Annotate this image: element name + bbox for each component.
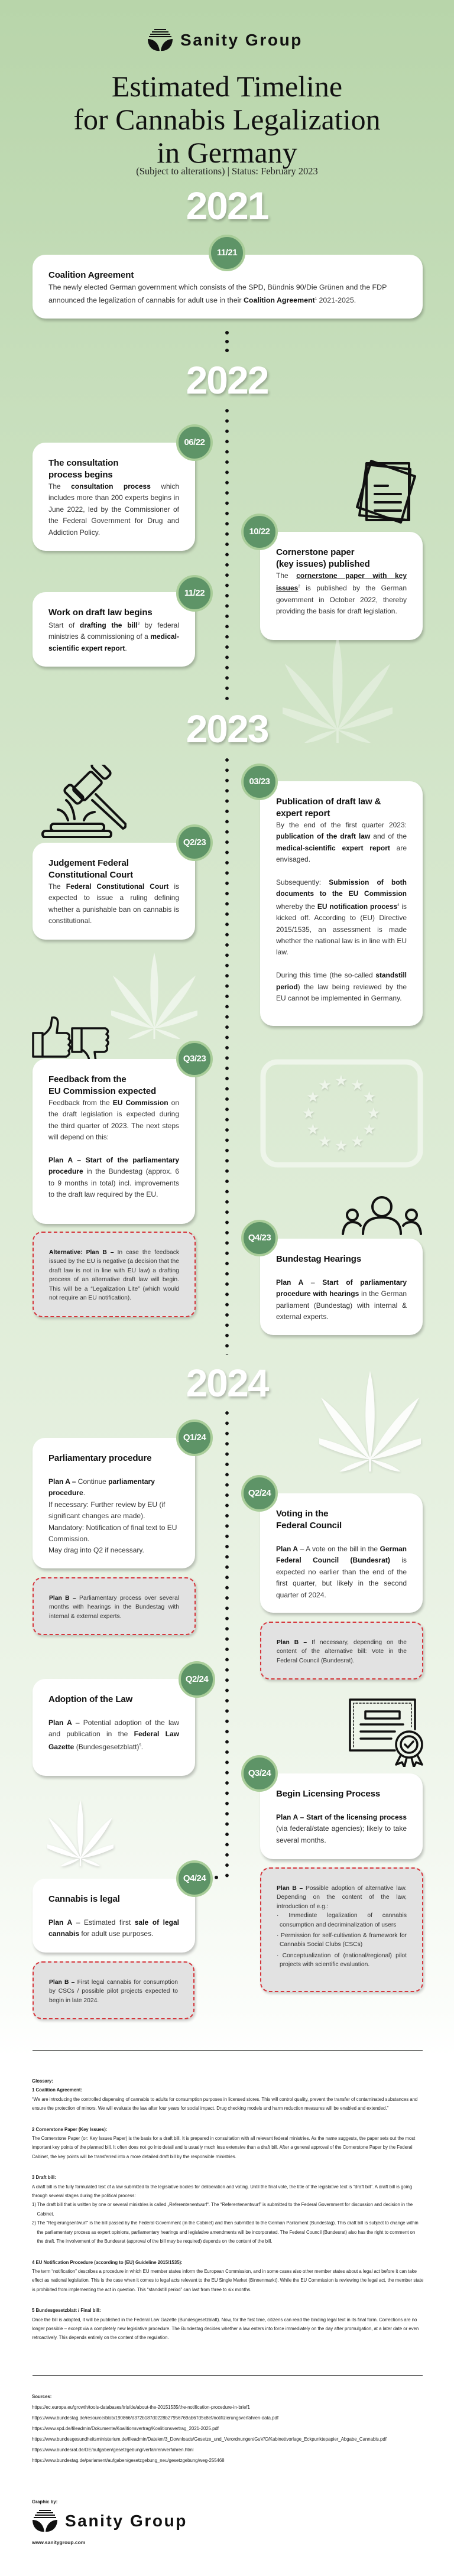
icon: certificate <box>349 1698 423 1767</box>
icon: cannabis leaf <box>111 953 197 1039</box>
glossary: 5 Bundesgesetzblatt / Final bill: <box>32 2308 101 2313</box>
card: feedback from EU commission <box>33 1059 195 1224</box>
card: publication of draft law: During this time (the so-called standstill period) the law being reviewed by the EU cannot be implemented in Germany. <box>276 971 407 1002</box>
glossary: retroactively. This depends entirely on the content of the regulation. <box>32 2335 169 2340</box>
title: Estimated Timeline <box>112 70 342 103</box>
sources: Sources: <box>32 2394 51 2399</box>
glossary: the parliamentary process as expert opinions, parliamentary hearings and legislative amendments will be incorporated. The Federal Council (Bundesrat) also has the right to comment on <box>37 2230 415 2235</box>
title: for Cannabis Legalization <box>73 103 381 136</box>
icon: thumbs up and down <box>32 1016 109 1059</box>
glossary: the draft. The involvement of the Bundesrat (approval of the bill may be required) depends on the content of the bill. <box>37 2239 272 2244</box>
plan B: federal council vote: Plan B – If necessary, depending on the content of the alternative bill: Vote in the Federal Council (Bundesrat). <box>277 1639 407 1664</box>
badge Q4/24: Q4/24 <box>183 1873 206 1883</box>
card: Coalition Agreement: Coalition Agreement <box>48 270 134 280</box>
badge Q1/24 <box>176 1419 213 1456</box>
glossary: through several stages during the political process: <box>32 2193 136 2198</box>
glossary: effect as national legislation. This is the case when it comes to legal acts relevant to the EU Single Market (Binnenmarkt). While the EU Commission is reviewing the legal act, the member state <box>32 2278 423 2283</box>
icon: EU flag <box>260 1059 423 1168</box>
card: voting in federal council <box>260 1493 423 1613</box>
glossary: 1) The draft bill that is written by one or several ministries is called „Referentenentwurf“. The “Referentenentwurf” is submitted to the Federal Government for discussion and decision in the <box>32 2202 413 2207</box>
badge 10/22 <box>241 514 278 550</box>
card: begin licensing process: Begin Licensing Process <box>276 1789 380 1799</box>
glossary: The Cornerstone Paper (or: Key Issues Paper) is the basis for a draft bill. It is prepared in consultation with all relevant federal ministries. As the name suggests, the paper sets out the most <box>32 2136 415 2141</box>
card: judgement federal constitutional court: Judgement Federal <box>48 858 129 868</box>
website: www.sanitygroup.com <box>32 2539 85 2545</box>
card: parliamentary procedure <box>33 1438 195 1568</box>
card: judgement federal constitutional court: The Federal Constitutional Court is expected to issue a ruling defining whether a punishable ban on cannabis is constitutional. <box>48 882 179 925</box>
glossary: 3 Draft bill: <box>32 2175 56 2180</box>
card: work on draft law <box>33 592 195 667</box>
plan B: alternative law: · Immediate legalization of cannabis consumption and decriminalization of users <box>277 1912 407 1928</box>
icon: cannabis leaf <box>319 1371 422 1473</box>
plan B: alternative law: · Permission for self-cultivation & framework for Cannabis Social Clubs (CSCs) <box>277 1932 407 1948</box>
card: begin licensing process: Plan A – Start of the licensing process (via federal/state agencies); likely to take several months. <box>276 1813 407 1844</box>
badge Q2/24 right: Q2/24 <box>248 1488 271 1498</box>
card: cannabis is legal <box>33 1879 195 1953</box>
card: voting in federal council: Voting in the <box>276 1509 328 1519</box>
card: Coalition Agreement: The newly elected German government which consists of the SPD, Bündnis 90/Die Grünen and the FDP announced the legalization of cannabis for adult use in their Coalition Agreement1 2021-2025. <box>48 283 387 304</box>
card: parliamentary procedure: Plan A – Continue parliamentary procedure. <box>48 1477 155 1497</box>
glossary: 4 EU Notification Procedure (according to (EU) Guideline 2015/1535): <box>32 2260 183 2265</box>
glossary: ensure the protection of minors. We will evaluate the law after four years for social impact. Drug checking models and harm reduction measures will be enabled and extended.” <box>32 2106 388 2111</box>
card: Bundestag hearings <box>260 1239 423 1335</box>
card: adoption of the law: Plan A – Potential adoption of the law and publication in the Federal Law Gazette (Bundesgesetzblatt)5. <box>48 1719 179 1751</box>
card: work on draft law: Work on draft law begins <box>48 608 153 618</box>
glossary <box>32 2078 423 2340</box>
badge 11/21 <box>209 235 245 271</box>
badge Q3/24 <box>241 1755 278 1792</box>
card: feedback from EU commission: Feedback from the EU Commission on the draft legislation is expected during the third quarter of 2023. The next steps will depend on this: <box>48 1099 179 1141</box>
plan B: alternative law: · Conceptualization of (national/regional) pilot projects with scientific evaluation. <box>277 1953 407 1968</box>
card: cornerstone paper: The cornerstone paper with key issues2 is published by the German government in October 2022, thereby providing the basis for draft legislation. <box>276 571 407 615</box>
year heading 2024: 2024 <box>186 1361 268 1405</box>
glossary: 2 Cornerstone Paper (Key Issues): <box>32 2127 107 2132</box>
year heading 2023: 2023 <box>186 707 268 751</box>
glossary: longer possible – except via a completely new legislative procedure. The Bundestag decides whether a law enters into force immediately on the day after promulgation, at a later date or even <box>32 2326 419 2331</box>
card: Coalition Agreement <box>33 255 423 319</box>
card: work on draft law: Start of drafting the bill3 by federal ministries & commissioning of a medical-scientific expert report. <box>48 621 179 652</box>
sources: https://www.bundestag.de/resource/blob/190866/d372b187d0228b27956769ab67d5c8ef/notifizierungsverfahren-data.pdf <box>32 2415 278 2421</box>
badge Q2/24 right <box>241 1475 278 1512</box>
glossary: Once the bill is adopted, it will be published in the Federal Law Gazette (Bundesgesetzblatt). Now, for the first time, citizens can read the binding legal text in its final form. Corrections are no <box>32 2317 417 2322</box>
card: publication of draft law: Subsequently: Submission of both documents to the EU Commission whereby the EU notification process4 is kicked off. According to (EU) Directive 2015/1535, an assessment is made whether the national law is in line with EU law. <box>276 878 407 956</box>
card: publication of draft law: expert report <box>276 808 330 818</box>
icon: cannabis leaf white <box>47 1801 115 1868</box>
badge Q2/24 left: Q2/24 <box>186 1674 208 1684</box>
card: voting in federal council: Plan A – A vote on the bill in the German Federal Council (Bundesrat) is expected no earlier than the end of the first quarter, but likely in the second quarter of 2024. <box>276 1545 407 1599</box>
icon: documents <box>356 460 416 524</box>
badge Q2/23: Q2/23 <box>183 837 206 847</box>
icon: gavel <box>41 765 127 838</box>
card: parliamentary procedure: If necessary: Further review by EU (if significant changes are made). <box>48 1500 165 1520</box>
sources: https://ec.europa.eu/growth/tools-databases/tris/de/about-the-20151535/the-notification-procedure-in-brief1 <box>32 2405 250 2410</box>
logo: Sanity Group header <box>148 29 303 51</box>
glossary: is prohibited from implementing the act in question. This “standstill period” can last from three to six months. <box>32 2287 251 2292</box>
sources: https://www.bundesrat.de/DE/aufgaben/gesetzgebung/verfahren/verfahren.html <box>32 2447 194 2452</box>
logo: Sanity Group header: Sanity Group <box>180 31 303 49</box>
badge Q2/23 <box>176 824 213 861</box>
card: consultation process: The consultation process which includes more than 200 experts begins in June 2022, led by the Commissioner of the Federal Government for Drug and Addiction Policy. <box>48 482 179 537</box>
badge Q3/23: Q3/23 <box>183 1054 206 1064</box>
badge 10/22: 10/22 <box>249 527 270 537</box>
card: publication of draft law: By the end of the first quarter 2023: publication of the draft law and of the medical-scientific expert report are envisaged. <box>276 821 407 863</box>
subtitle: (Subject to alterations) | Status: February 2023 <box>136 165 318 177</box>
badge 03/23: 03/23 <box>249 777 270 787</box>
card: publication of draft law <box>260 781 423 1026</box>
badge Q4/23 <box>241 1220 278 1256</box>
badge Q4/23: Q4/23 <box>248 1233 271 1243</box>
card: cornerstone paper <box>260 532 423 640</box>
card: Bundestag hearings: Bundestag Hearings <box>276 1254 361 1264</box>
plan B: alternative law <box>260 1867 423 1992</box>
badge 11/22: 11/22 <box>184 588 205 598</box>
card: voting in federal council: Federal Council <box>276 1521 342 1531</box>
card: feedback from EU commission: EU Commission expected <box>48 1086 156 1096</box>
plan B: federal council vote <box>260 1622 423 1680</box>
card: judgement federal constitutional court <box>33 843 195 940</box>
badge Q3/24: Q3/24 <box>248 1768 271 1778</box>
badge 06/22: 06/22 <box>184 437 205 447</box>
card: parliamentary procedure: Mandatory: Notification of final text to EU Commission. <box>48 1523 177 1543</box>
card: cornerstone paper: (key issues) published <box>276 559 370 569</box>
glossary: Glossary: <box>32 2078 53 2084</box>
card: Bundestag hearings: Plan A – Start of parliamentary procedure with hearings in the German parliament (Bundestag) with internal & external experts. <box>276 1278 407 1321</box>
card: consultation process: process begins <box>48 470 113 480</box>
glossary: important key points of the planned bill. It often does not go into detail and is usually much less extensive than a draft bill. After a general approval of the Cornerstone Paper by the Federal <box>32 2145 413 2150</box>
sources: https://www.bundesgesundheitsministerium.de/fileadmin/Dateien/3_Downloads/Gesetze_und_Verordnungen/GuV/C/Kabinettvorlage_Eckpunktepapier_Abgabe_Cannabis.pdf <box>32 2437 387 2442</box>
badge Q1/24: Q1/24 <box>183 1432 206 1443</box>
glossary: The term “notification” describes a procedure in which EU member states inform the European Commission, and in some cases also other member states about a legal act before it can take <box>32 2269 417 2274</box>
glossary: 2) The “Regierungsentwurf” is the bill passed by the Federal Government (in the Cabinet) and then submitted to the German Parliament (Bundestag). This draft bill is subject to change within <box>32 2220 419 2226</box>
badge 11/21: 11/21 <box>217 248 237 258</box>
logo: Sanity Group footer: Sanity Group <box>65 2512 187 2530</box>
graphic by: Graphic by: <box>32 2499 57 2504</box>
card: consultation process: The consultation <box>48 458 118 468</box>
card: publication of draft law: Publication of draft law & <box>276 797 381 807</box>
card: parliamentary procedure: May drag into Q2 if necessary. <box>48 1546 144 1554</box>
card: feedback from EU commission: Feedback from the <box>48 1074 127 1084</box>
logo: Sanity Group footer <box>33 2510 187 2532</box>
sources: https://www.spd.de/fileadmin/Dokumente/Koalitionsvertrag/Koalitionsvertrag_2021-2025.pdf <box>32 2426 219 2431</box>
card: parliamentary procedure: Parliamentary procedure <box>48 1453 151 1463</box>
card: cannabis is legal: Plan A – Estimated first sale of legal cannabis for adult use purposes. <box>48 1918 179 1938</box>
icon: people <box>342 1196 422 1235</box>
card: feedback from EU commission: Plan A – Start of the parliamentary procedure in the Bundestag (approx. 6 to 9 months in total) incl. improvements to the draft law required by the EU. <box>48 1156 179 1198</box>
year heading 2022: 2022 <box>186 358 268 402</box>
plan B: CSCs <box>33 1961 194 2019</box>
badge 11/22 <box>176 575 213 612</box>
title: in Germany <box>157 136 297 169</box>
glossary: Cabinet. <box>37 2211 54 2217</box>
badge Q3/23 <box>176 1041 213 1077</box>
plan B: parliamentary process: Plan B – Parliamentary process over several months with hearings in the Bundestag with internal & external experts. <box>49 1595 179 1620</box>
badge Q2/24 left <box>179 1661 215 1698</box>
plan B: parliamentary process <box>33 1577 196 1635</box>
card: adoption of the law <box>33 1679 195 1776</box>
glossary: A draft bill is the fully formulated text of a law submitted to the legislative bodies for deliberation and voting. Until the final vote, the title of the legislative text is “draft bill”. A draft bill is going <box>32 2184 412 2190</box>
sources <box>32 2394 387 2463</box>
badge 03/23 <box>241 764 278 800</box>
icon: cannabis leaf watermark <box>283 640 393 743</box>
plan B: legalization lite: Alternative: Plan B – In case the feedback issued by the EU is negative (a decision that the draft law is not in line with EU law) a drafting process of an alternative draft law will begin. This will be a “Legalization Lite” (which would not require an EU notification). <box>49 1249 179 1301</box>
card: judgement federal constitutional court: Constitutional Court <box>48 870 133 880</box>
sources: https://www.bundestag.de/parlament/aufgaben/gesetzgebung_neu/gesetzgebung/weg-255468 <box>32 2458 225 2463</box>
card: cannabis is legal: Cannabis is legal <box>48 1894 120 1904</box>
glossary: 1 Coalition Agreement: <box>32 2087 82 2093</box>
plan B: legalization lite <box>33 1232 196 1317</box>
card: cornerstone paper: Cornerstone paper <box>276 547 355 557</box>
badge Q4/24 <box>176 1860 213 1897</box>
plan B: CSCs: Plan B – First legal cannabis for consumption by CSCs / possible pilot projects expected to begin in late 2024. <box>49 1979 178 2004</box>
badge 06/22 <box>176 424 213 461</box>
card: begin licensing process <box>260 1773 423 1859</box>
card: consultation process <box>33 443 195 551</box>
glossary: “We are introducing the controlled dispensing of cannabis to adults for consumption purposes in licensed stores. This will control quality, prevent the transfer of contaminated substances and <box>32 2097 417 2102</box>
card: adoption of the law: Adoption of the Law <box>48 1694 132 1704</box>
year heading 2021: 2021 <box>186 184 268 228</box>
title <box>73 70 381 169</box>
plan B: alternative law: Plan B – Possible adoption of alternative law. Depending on the content of the law, introduction of e.g.: <box>277 1885 407 1910</box>
glossary: Cabinet, the key points will be transferred into a more detailed draft bill by the responsible ministries. <box>32 2154 236 2159</box>
